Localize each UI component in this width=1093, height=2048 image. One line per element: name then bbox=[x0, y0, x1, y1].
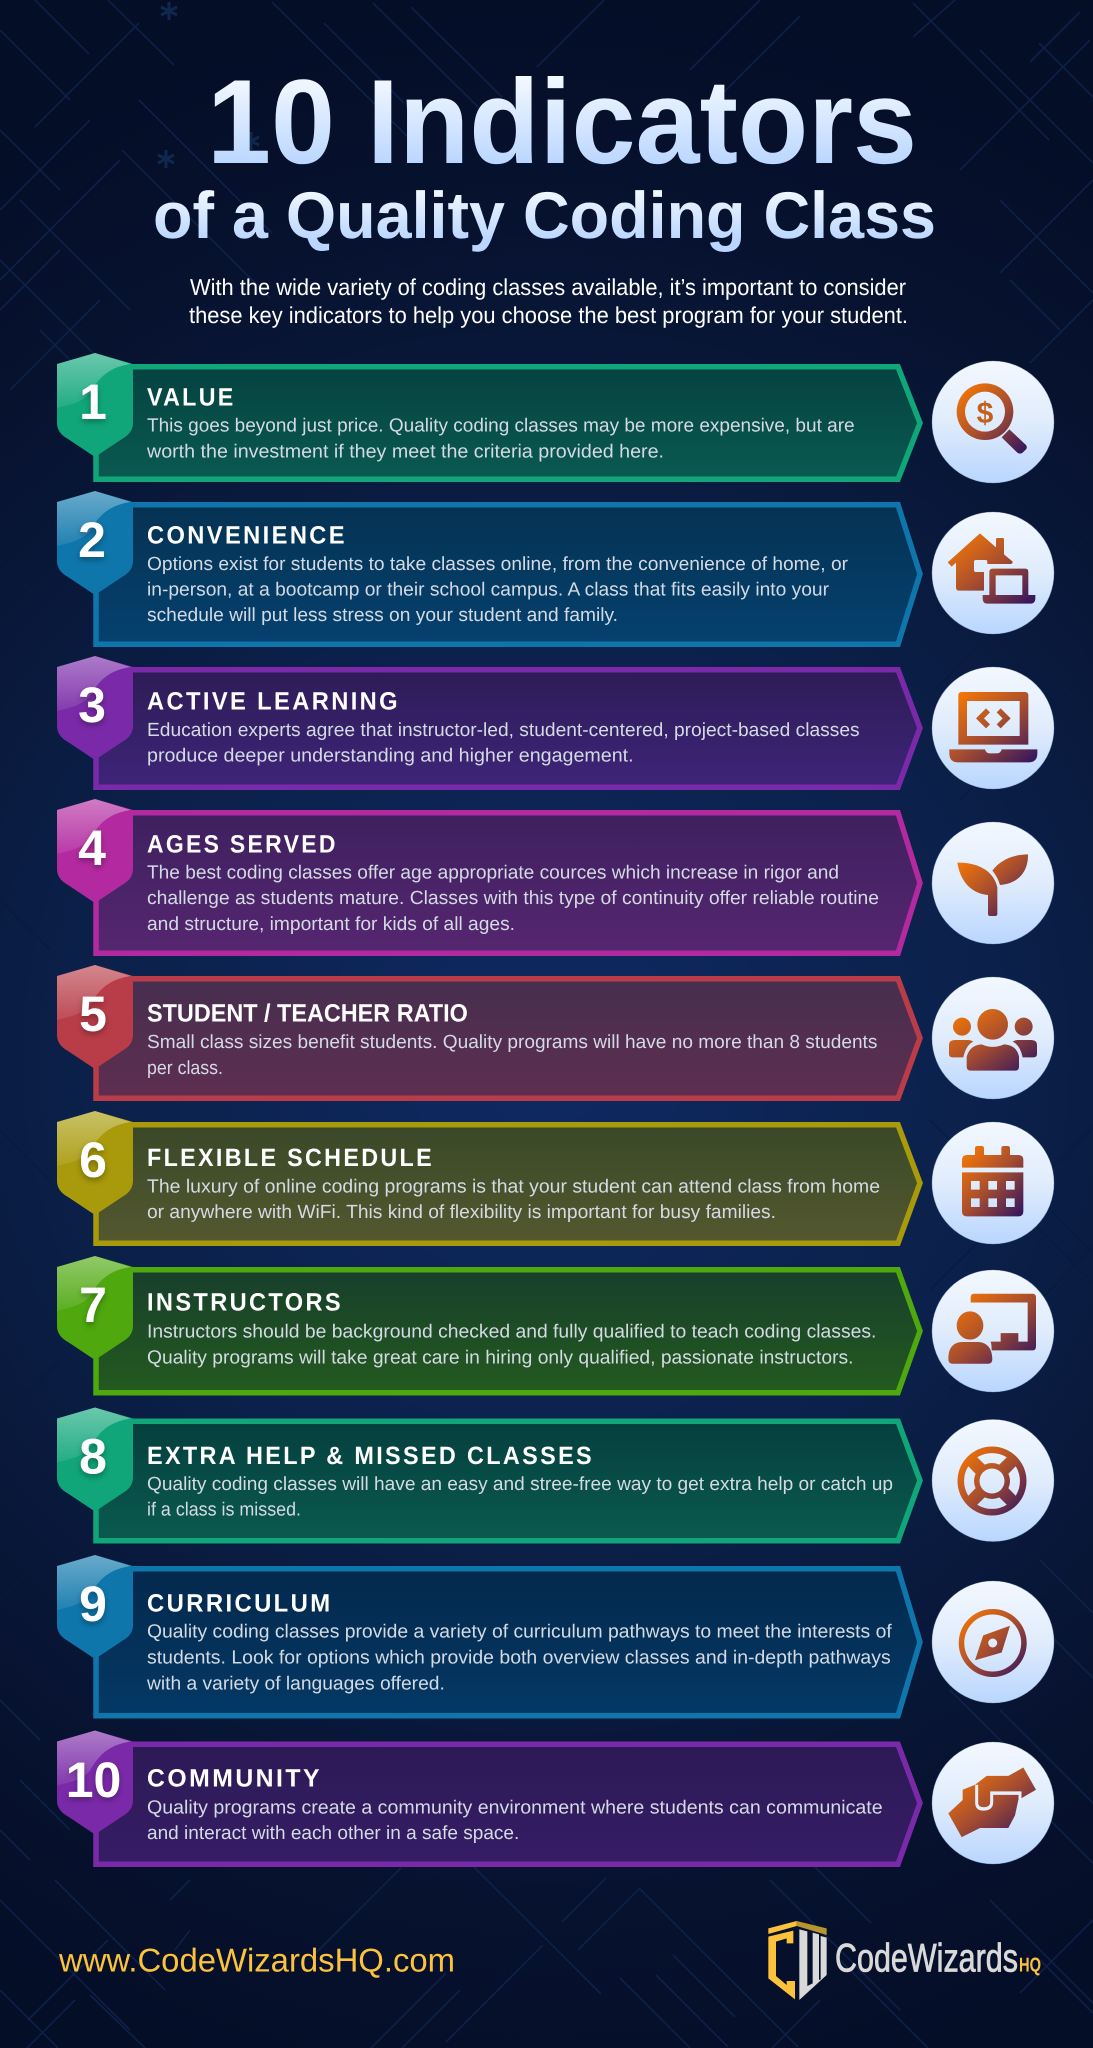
heading: STUDENT / TEACHER RATIO bbox=[147, 1000, 468, 1028]
panel: 10 community bbox=[57, 1730, 1054, 1864]
body text: with a variety of languages offered. bbox=[146, 1673, 445, 1694]
panel: 9 curriculum bbox=[57, 1555, 1054, 1716]
icon: house and laptop bbox=[932, 512, 1054, 634]
banner shape bbox=[96, 813, 920, 953]
icon: sprout bbox=[932, 822, 1054, 944]
panel: 1 value bbox=[57, 353, 1054, 483]
logo wordmark: CodeWizards bbox=[835, 1937, 1018, 1981]
banner shape bbox=[96, 1125, 920, 1243]
body text bbox=[147, 1176, 880, 1223]
body text: This goes beyond just price. Quality coding classes may be more expensive, but are bbox=[147, 416, 855, 437]
badge 5: 5 bbox=[79, 986, 107, 1042]
icon: handshake bbox=[932, 1742, 1054, 1864]
banner shape bbox=[96, 1744, 920, 1864]
logo HQ: HQ bbox=[1019, 1955, 1041, 1977]
panel: 6 flexible schedule bbox=[57, 1111, 1054, 1244]
badge 10 bbox=[57, 1730, 133, 1834]
banner shape bbox=[96, 670, 920, 787]
heading: CONVENIENCE bbox=[147, 521, 347, 549]
panel: 8 extra help bbox=[57, 1408, 1054, 1542]
heading: ACTIVE LEARNING bbox=[147, 687, 400, 715]
body text: and interact with each other in a safe space. bbox=[147, 1823, 519, 1844]
banner shape bbox=[96, 1270, 920, 1393]
icon: life ring bbox=[932, 1420, 1054, 1542]
icon: compass bbox=[932, 1581, 1054, 1703]
badge 3 bbox=[57, 656, 133, 760]
body text: Instructors should be background checked and fully qualified to teach coding classes. bbox=[147, 1321, 876, 1342]
badge 10: 10 bbox=[66, 1752, 121, 1808]
banner shape bbox=[96, 1421, 920, 1541]
body text: or anywhere with WiFi. This kind of flexibility is important for busy families. bbox=[147, 1202, 776, 1223]
body text: Quality programs create a community environment where students can communicate bbox=[147, 1797, 883, 1818]
intro text bbox=[189, 274, 908, 328]
badge 6: 6 bbox=[79, 1132, 107, 1188]
icon: instructor at board bbox=[932, 1270, 1054, 1392]
body text bbox=[147, 554, 849, 626]
panel: 2 convenience bbox=[57, 491, 1054, 644]
body text: worth the investment if they meet the criteria provided here. bbox=[146, 442, 664, 463]
logo: CodeWizardsHQ bbox=[768, 1921, 1041, 2000]
badge 8: 8 bbox=[79, 1428, 107, 1484]
body text: Small class sizes benefit students. Quality programs will have no more than 8 students bbox=[147, 1032, 877, 1053]
panel: 5 student teacher ratio bbox=[57, 965, 1054, 1099]
body text: and structure, important for kids of all ages. bbox=[147, 914, 515, 935]
icon: calendar bbox=[932, 1122, 1054, 1244]
body text: if a class is missed. bbox=[147, 1500, 301, 1521]
badge 6 bbox=[57, 1111, 133, 1215]
body text: challenge as students mature. Classes with this type of continuity offer reliable routine bbox=[147, 888, 879, 909]
icon: magnifier with dollar bbox=[932, 361, 1054, 483]
body text bbox=[147, 1321, 876, 1368]
panel: 7 instructors bbox=[57, 1256, 1054, 1393]
heading: VALUE bbox=[147, 384, 236, 412]
body text: students. Look for options which provide both overview classes and in-depth pathways bbox=[147, 1647, 891, 1668]
body text: produce deeper understanding and higher engagement. bbox=[147, 746, 634, 767]
body text bbox=[147, 720, 860, 767]
body text: Quality coding classes provide a variety of curriculum pathways to meet the interests of bbox=[147, 1622, 892, 1643]
badge 3: 3 bbox=[78, 677, 106, 733]
body text bbox=[147, 1797, 883, 1844]
badge 1 bbox=[57, 353, 133, 457]
banner shape bbox=[96, 1569, 920, 1716]
body text: in-person, at a bootcamp or their school campus. A class that fits easily into your bbox=[147, 580, 830, 601]
heading: EXTRA HELP & MISSED CLASSES bbox=[147, 1442, 594, 1470]
body text: The best coding classes offer age appropriate cources which increase in rigor and bbox=[147, 862, 839, 883]
heading: FLEXIBLE SCHEDULE bbox=[147, 1144, 434, 1172]
title line 2: of a Quality Coding Class bbox=[153, 178, 936, 252]
logo shield bbox=[768, 1921, 827, 2000]
intro text: With the wide variety of coding classes available, it’s important to consider bbox=[190, 274, 906, 300]
body text: Options exist for students to take classes online, from the convenience of home, or bbox=[147, 554, 849, 575]
icon: people group bbox=[932, 977, 1054, 1099]
badge 8 bbox=[57, 1408, 133, 1512]
intro text: these key indicators to help you choose the best program for your student. bbox=[189, 302, 908, 328]
title line 1: 10 Indicators bbox=[207, 55, 917, 189]
body text bbox=[147, 862, 879, 935]
badge 7: 7 bbox=[79, 1277, 107, 1333]
badge 2 bbox=[57, 491, 133, 595]
heading: AGES SERVED bbox=[147, 830, 338, 858]
website url: www.CodeWizardsHQ.com bbox=[58, 1942, 455, 1979]
panel: 3 active learning bbox=[57, 656, 1054, 789]
body text: schedule will put less stress on your student and family. bbox=[147, 605, 618, 626]
badge 4: 4 bbox=[78, 820, 106, 876]
body text bbox=[147, 1032, 877, 1079]
icon: laptop with code bbox=[932, 667, 1054, 789]
banner shape bbox=[96, 367, 920, 479]
badge 5 bbox=[57, 965, 133, 1069]
badge 1: 1 bbox=[79, 374, 107, 430]
banner shape bbox=[96, 505, 920, 644]
body text: The luxury of online coding programs is that your student can attend class from home bbox=[147, 1176, 880, 1197]
icon: magnifier with dollar: $ bbox=[977, 397, 994, 430]
panel: 4 ages served bbox=[57, 799, 1054, 953]
badge 9: 9 bbox=[79, 1576, 107, 1632]
heading: INSTRUCTORS bbox=[147, 1289, 343, 1317]
badge 9 bbox=[57, 1555, 133, 1659]
badge 7 bbox=[57, 1256, 133, 1360]
decorative stars bbox=[158, 2, 259, 168]
body text bbox=[146, 1622, 892, 1694]
banner shape bbox=[96, 979, 920, 1098]
body text: per class. bbox=[147, 1058, 223, 1079]
badge 2: 2 bbox=[78, 512, 106, 568]
heading: CURRICULUM bbox=[147, 1589, 332, 1617]
badge 4 bbox=[57, 799, 133, 903]
body text: Quality programs will take great care in hiring only qualified, passionate instructors. bbox=[147, 1347, 853, 1368]
body text: Education experts agree that instructor-led, student-centered, project-based classes bbox=[147, 720, 860, 741]
body text bbox=[147, 1474, 893, 1521]
body text bbox=[146, 416, 855, 463]
body text: Quality coding classes will have an easy and stree-free way to get extra help or catch up bbox=[147, 1474, 893, 1495]
title bbox=[153, 55, 936, 252]
heading: COMMUNITY bbox=[147, 1765, 322, 1793]
